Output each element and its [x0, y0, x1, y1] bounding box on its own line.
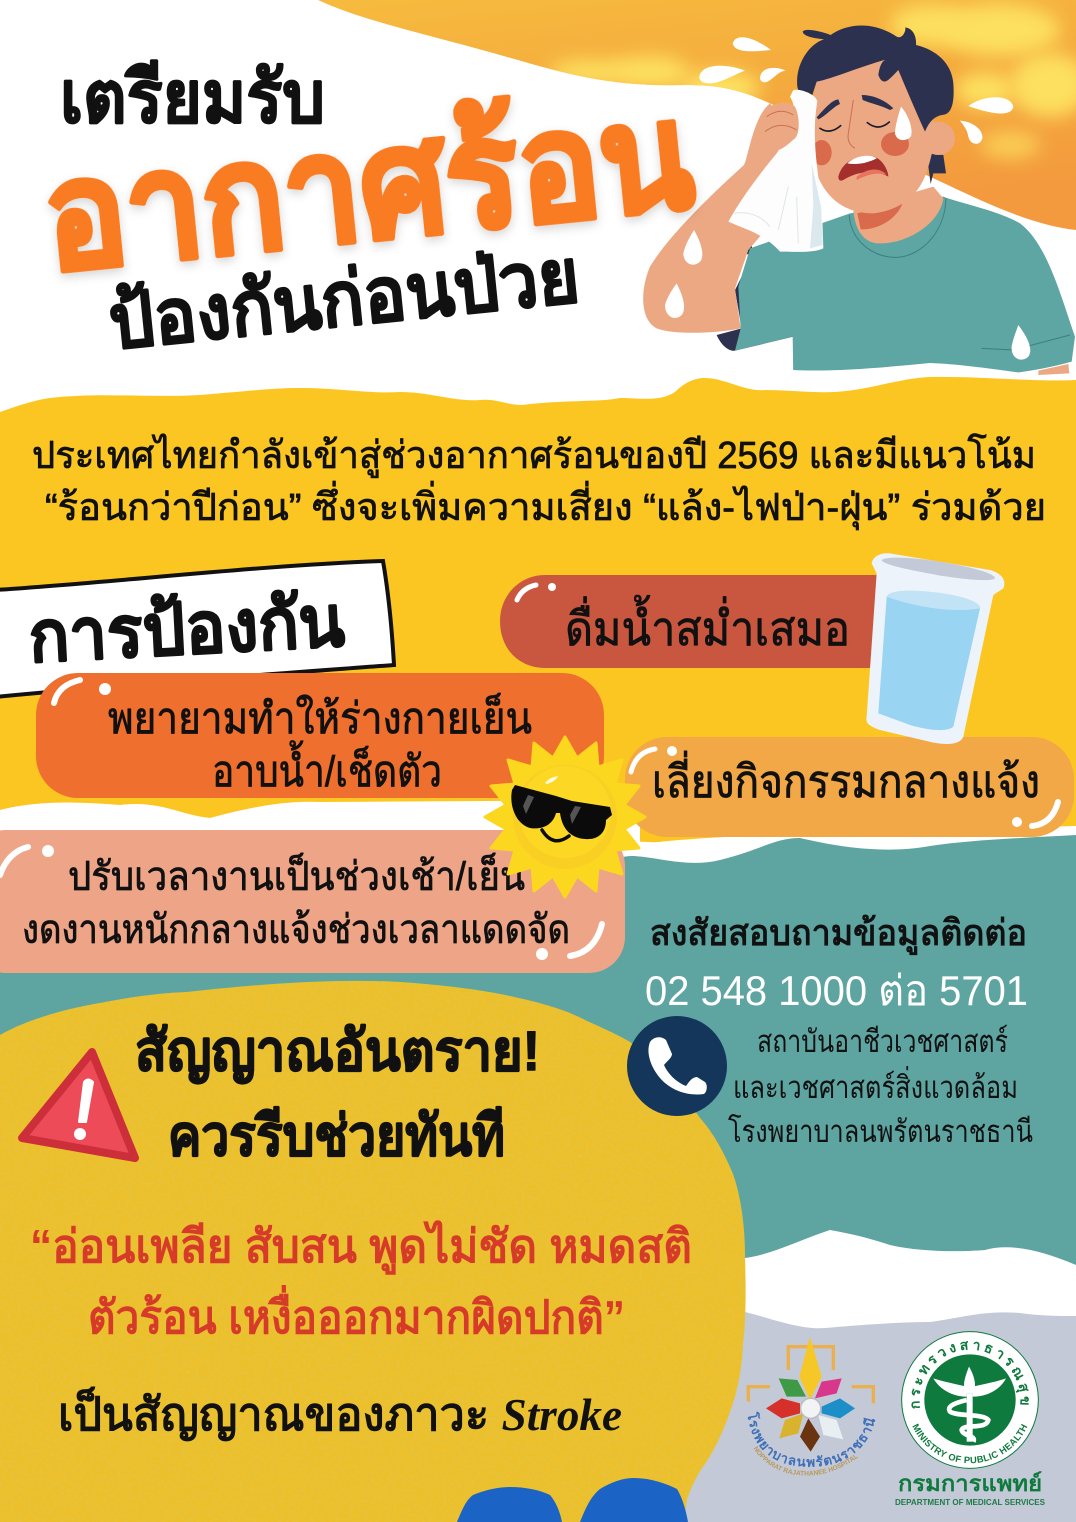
blue shapes at bottom [457, 1478, 688, 1522]
pill: adjust work time: ปรับเวลางานเป็นช่วงเช้า/เย็น [68, 852, 525, 899]
institute name: สถาบันอาชีวเวชศาสตร์ [757, 1024, 1008, 1059]
yellow band torn paper [0, 363, 1076, 860]
institute name: และเวชศาสตร์สิ่งแวดล้อม [733, 1066, 1018, 1105]
logo: Department of Medical Services: กรมการแพทย์ [898, 1471, 1042, 1496]
pill: avoid outdoor activities: เลี่ยงกิจกรรมกลางแจ้ง [652, 750, 1040, 807]
heading: prevention: การป้องกัน [27, 582, 346, 678]
title line 2: อากาศร้อน [36, 70, 700, 302]
danger symptoms: ตัวร้อน เหงื่อออกมากผิดปกติ” [88, 1285, 625, 1343]
towel [728, 90, 823, 252]
white torn strip [0, 800, 640, 880]
panel: danger signs textured blob [0, 981, 746, 1522]
icon: sun with sunglasses [485, 737, 645, 897]
icon: glass of water [866, 553, 1004, 744]
pill: cool the body: อาบน้ำ/เช็ดตัว [212, 740, 442, 796]
hand [759, 103, 799, 151]
pill: adjust work time [0, 830, 625, 973]
icon: warning triangle [22, 1052, 135, 1158]
shirt [735, 197, 1075, 378]
title [36, 58, 700, 366]
pill: adjust work time: งดงานหนักกลางแจ้งช่วงเวลาแดดจัด [22, 908, 570, 952]
heading: prevention [0, 561, 394, 697]
title line 3: ป้องกันก่อนป่วย [105, 234, 583, 366]
neck [853, 187, 943, 243]
danger heading: ควรรีบช่วยทันที [168, 1104, 505, 1167]
stroke warning: เป็นสัญญาณของภาวะ Stroke [58, 1386, 622, 1441]
grey footer panel [660, 1312, 1076, 1522]
danger symptoms [30, 1220, 692, 1343]
mouth [838, 156, 888, 181]
phone number: 02 548 1000 ต่อ 5701 [645, 967, 1028, 1014]
intro text: ประเทศไทยกำลังเข้าสู่ช่วงอากาศร้อนของปี 2569 และมีแนวโน้ม [32, 433, 1036, 478]
forearm [643, 103, 820, 333]
logo: Nopparat Rajathanee Hospital: NOPPARAT RAJATHANEE HOSPITAL [754, 1446, 858, 1476]
pill: cool the body [36, 673, 604, 798]
pill: cool the body: พยายามทำให้ร่างกายเย็น [108, 693, 532, 743]
cheeks [812, 140, 832, 165]
logo: Ministry of Public Health seal: MINISTRY OF PUBLIC HEALTH [912, 1424, 1028, 1464]
logo: Nopparat Rajathanee Hospital [746, 1336, 876, 1476]
dark sleeve inside [717, 230, 793, 351]
face [811, 57, 934, 213]
pill: drink water [500, 575, 880, 668]
danger heading [135, 1019, 540, 1167]
teal panel torn [0, 835, 1076, 1265]
intro text: “ร้อนกว่าปีก่อน” ซึ่งจะเพิ่มความเสี่ยง “แล้ง-ไฟป่า-ฝุ่น” ร่วมด้วย [45, 481, 1046, 530]
hot sky background [318, 0, 1076, 230]
pill: avoid outdoor activities [625, 737, 1074, 837]
sweat drops [665, 37, 1030, 360]
pill: drink water: ดื่มน้ำสม่ำเสมอ [565, 595, 850, 655]
institute name [728, 1024, 1033, 1149]
intro text [32, 433, 1046, 530]
eyebrows [817, 99, 840, 119]
icon: phone [627, 1016, 727, 1116]
danger heading: สัญญาณอันตราย! [135, 1019, 540, 1084]
illustration: man wiping sweat [643, 25, 1075, 378]
logo: Nopparat Rajathanee Hospital: โรงพยาบาลนพรัตนราชธานี [748, 1412, 876, 1467]
contact heading: สงสัยสอบถามข้อมูลติดต่อ [650, 912, 1027, 956]
hair [797, 25, 954, 132]
logo: Ministry of Public Health seal: กระทรวงสาธารณสุข [911, 1341, 1029, 1409]
danger symptoms: “อ่อนเพลีย สับสน พูดไม่ชัด หมดสติ [30, 1220, 692, 1275]
contact block [627, 912, 1033, 1149]
logo: Department of Medical Services: DEPARTMENT OF MEDICAL SERVICES [895, 1498, 1046, 1507]
title line 1: เตรียมรับ [60, 58, 325, 138]
eyes [820, 122, 889, 131]
logo: Ministry of Public Health seal [901, 1331, 1039, 1469]
logo: Department of Medical Services [895, 1471, 1046, 1507]
hair back and ear [927, 153, 946, 184]
